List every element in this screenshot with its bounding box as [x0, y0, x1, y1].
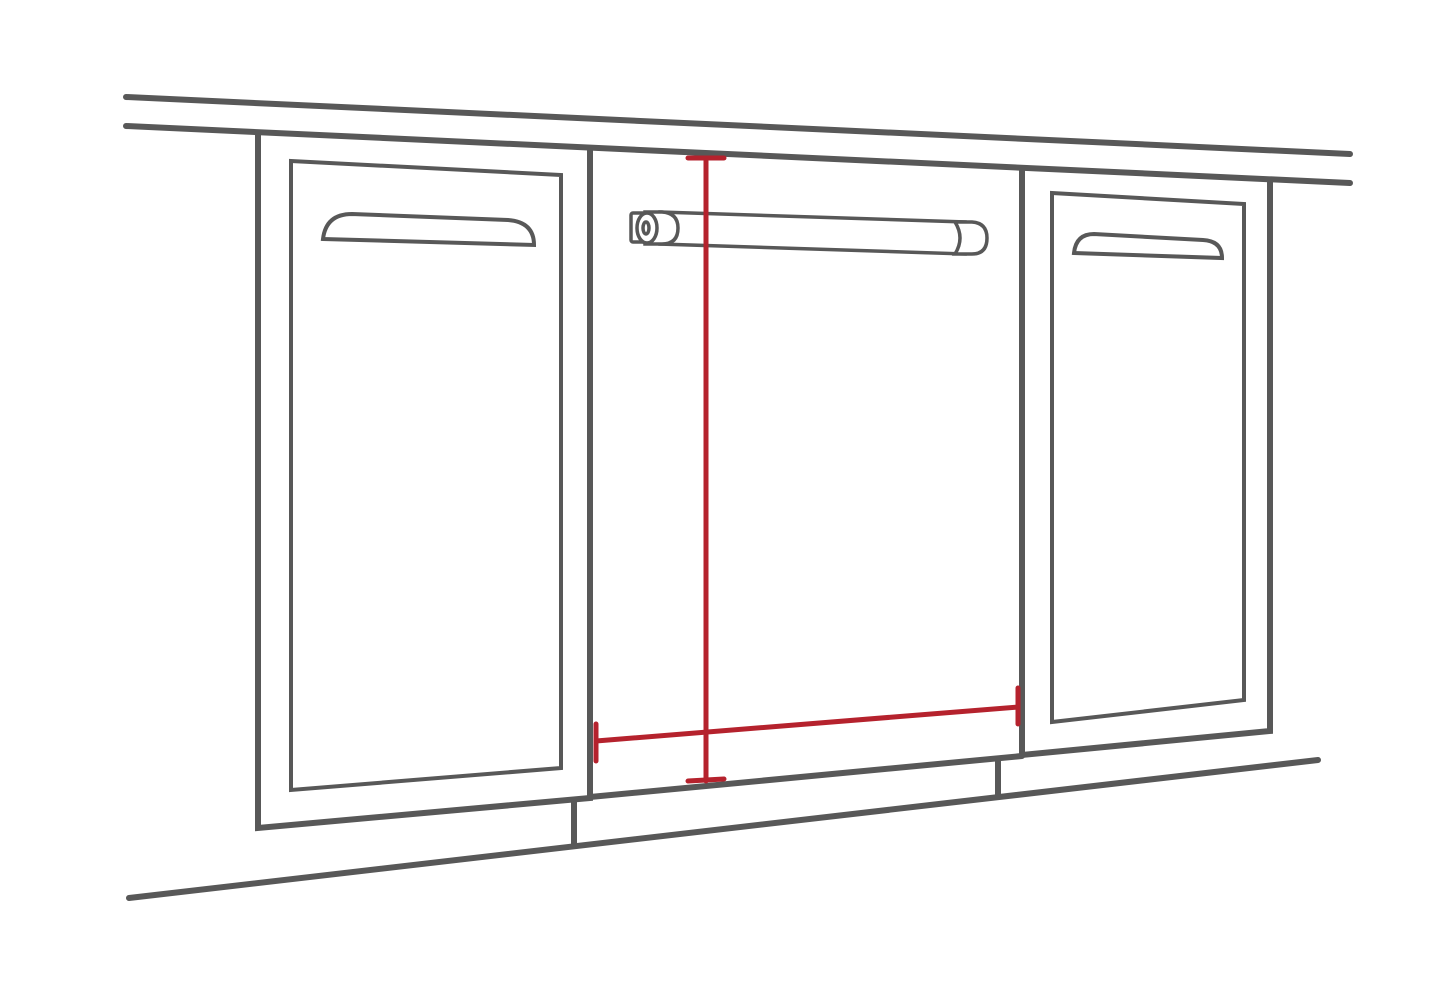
icon: towel bar / rod — [631, 212, 987, 254]
right handle — [1074, 234, 1222, 258]
left handle — [323, 214, 534, 245]
arrow: height measurement — [688, 158, 724, 781]
countertop lines — [126, 97, 1350, 183]
left cabinet — [258, 135, 590, 828]
right cabinet — [1022, 170, 1270, 755]
arrow: width measurement — [596, 688, 1018, 761]
floor and kick plates — [129, 756, 1318, 898]
